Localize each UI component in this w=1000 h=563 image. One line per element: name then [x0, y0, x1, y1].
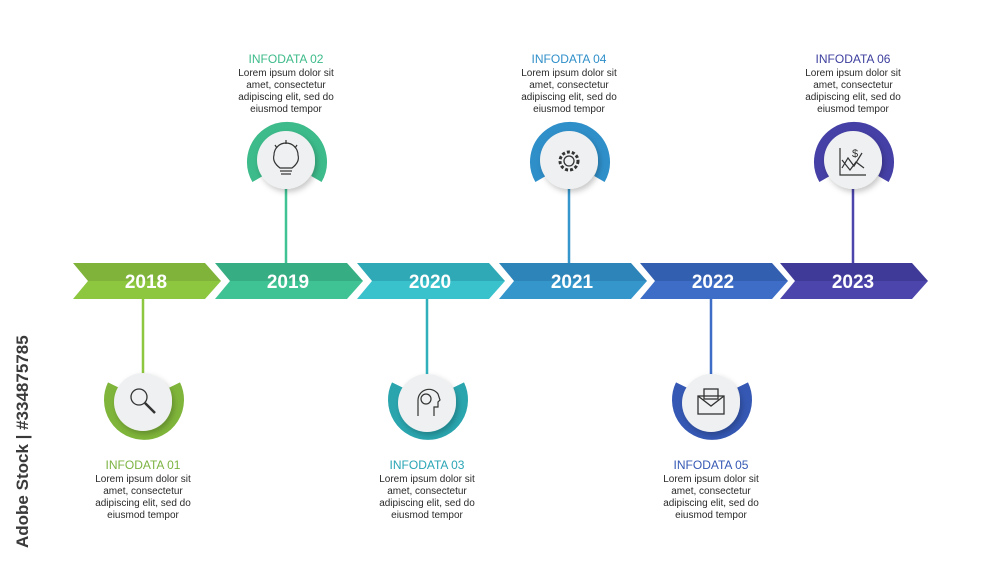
text 05: INFODATA 05 — [674, 458, 749, 472]
text 03: adipiscing elit, sed do — [379, 498, 475, 509]
text 01: INFODATA 01 — [106, 458, 181, 472]
text 03: INFODATA 03 — [390, 458, 465, 472]
timeline arrows — [73, 263, 928, 299]
text 01: adipiscing elit, sed do — [95, 498, 191, 509]
arrow 2022 — [640, 263, 788, 299]
text 05: amet, consectetur — [671, 486, 751, 497]
text 01: Lorem ipsum dolor sit — [95, 474, 191, 485]
text 03 — [379, 458, 475, 521]
text 05: eiusmod tempor — [675, 510, 748, 521]
text 03: Lorem ipsum dolor sit — [379, 474, 475, 485]
text 04 — [521, 52, 617, 115]
text 05: Lorem ipsum dolor sit — [663, 474, 759, 485]
text 03: amet, consectetur — [387, 486, 467, 497]
connector lines — [143, 185, 853, 375]
node 04 — [536, 128, 604, 189]
node 05 — [678, 374, 746, 434]
node 06 — [820, 128, 888, 189]
text 04: adipiscing elit, sed do — [521, 92, 617, 103]
text 02: adipiscing elit, sed do — [238, 92, 334, 103]
arrow 2020 — [357, 263, 505, 299]
text 05: adipiscing elit, sed do — [663, 498, 759, 509]
icon: magnifier — [131, 389, 155, 413]
text 01: eiusmod tempor — [107, 510, 180, 521]
icon: head gear — [418, 389, 440, 416]
text 04: eiusmod tempor — [533, 104, 606, 115]
node 01 — [110, 373, 178, 434]
watermark id: Adobe Stock | #334875785 — [13, 335, 32, 548]
node 03 — [394, 374, 462, 434]
text 04: Lorem ipsum dolor sit — [521, 68, 617, 79]
text 02: INFODATA 02 — [249, 52, 324, 66]
arrow 2023: 2023 — [832, 272, 874, 293]
arrow 2023 — [780, 263, 928, 299]
text 04: INFODATA 04 — [532, 52, 607, 66]
arrow 2018 — [73, 263, 221, 299]
arrow 2021 — [499, 263, 647, 299]
node 02 — [253, 128, 321, 189]
text 06: amet, consectetur — [813, 80, 893, 91]
text 06: eiusmod tempor — [817, 104, 890, 115]
text 06: INFODATA 06 — [816, 52, 891, 66]
arrow 2018: 2018 — [125, 272, 167, 293]
text 03: eiusmod tempor — [391, 510, 464, 521]
arrow 2022: 2022 — [692, 272, 734, 293]
text 01 — [95, 458, 191, 521]
arrow 2021: 2021 — [551, 272, 594, 293]
arrow 2019: 2019 — [267, 272, 309, 293]
text 04: amet, consectetur — [529, 80, 609, 91]
icon: envelope — [698, 389, 724, 414]
text 02: amet, consectetur — [246, 80, 326, 91]
arrow 2019 — [215, 263, 363, 299]
icon: gear — [560, 152, 578, 170]
text 01: amet, consectetur — [103, 486, 183, 497]
text 02 — [238, 52, 334, 115]
arrow 2020: 2020 — [409, 272, 451, 293]
text 02: eiusmod tempor — [250, 104, 323, 115]
text 05 — [663, 458, 759, 521]
text 06 — [805, 52, 901, 115]
icon: bulb — [274, 140, 298, 174]
text 02: Lorem ipsum dolor sit — [238, 68, 334, 79]
text 06: Lorem ipsum dolor sit — [805, 68, 901, 79]
text 06: adipiscing elit, sed do — [805, 92, 901, 103]
icon: chart: $ — [852, 148, 858, 160]
